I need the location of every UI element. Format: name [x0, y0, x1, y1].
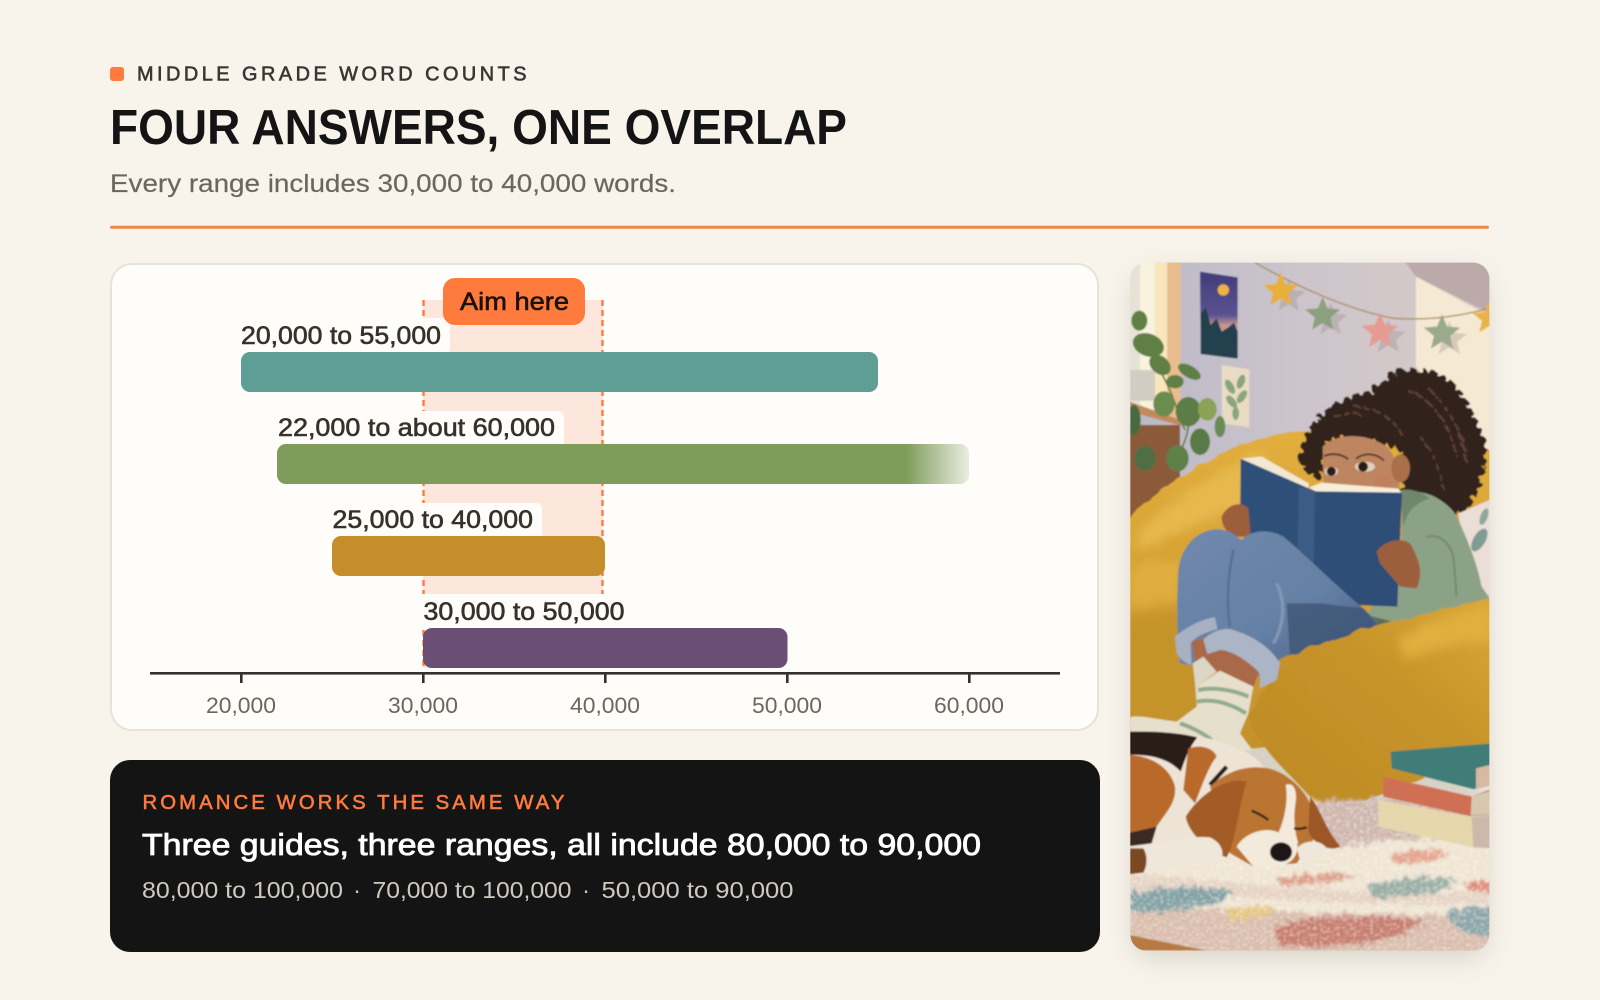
- callout ranges: ·: [353, 877, 361, 903]
- callout ranges: 70,000 to 100,000: [372, 877, 572, 903]
- stacked books: [1378, 743, 1493, 848]
- callout ranges: 50,000 to 90,000: [602, 877, 794, 903]
- callout ranges: ·: [582, 877, 590, 903]
- dog ears: [1186, 781, 1247, 857]
- x axis: 20,000: [206, 693, 276, 718]
- bar: 22,000 to about 60,000: 22,000 to about 60,000: [278, 414, 555, 442]
- subtitle: Every range includes 30,000 to 40,000 words.: [110, 170, 676, 198]
- star bunting: [1255, 263, 1506, 354]
- feet and cuffs: [1175, 617, 1280, 688]
- jeans: [1177, 529, 1387, 680]
- callout eyebrow: ROMANCE WORKS THE SAME WAY: [142, 792, 568, 814]
- callout ranges: 80,000 to 100,000: [142, 877, 343, 903]
- x axis: 30,000: [388, 693, 458, 718]
- bar: 20,000 to 55,000: 20,000 to 55,000: [241, 322, 441, 350]
- beanbag front lobe: [1248, 597, 1497, 804]
- hoodie: [1360, 490, 1493, 627]
- eyebrow marker: [110, 67, 124, 81]
- face: [1323, 436, 1410, 492]
- hair: [1302, 371, 1484, 512]
- callout headline: Three guides, three ranges, all include 80,000 to 90,000: [142, 827, 981, 862]
- wall: [1140, 262, 1490, 478]
- poster: night forest: [1200, 272, 1238, 359]
- x axis: 50,000: [752, 693, 822, 718]
- eyebrow: MIDDLE GRADE WORD COUNTS: [137, 64, 530, 86]
- x axis: [150, 672, 1060, 718]
- sleeping beagle: [1127, 731, 1341, 875]
- hands: [1222, 504, 1420, 588]
- header: [110, 64, 847, 198]
- bar: 30,000 to 50,000: 30,000 to 50,000: [424, 598, 624, 626]
- image shadow: [1134, 274, 1486, 958]
- rug: [1120, 800, 1500, 957]
- dog head: [1210, 767, 1317, 867]
- poster: leaf print: [1222, 365, 1249, 427]
- socks: [1130, 657, 1253, 751]
- x axis: 40,000: [570, 693, 640, 718]
- bar: 30,000 to 50,000: [423, 598, 788, 668]
- shelf and plant: [1127, 311, 1225, 522]
- callout: aim here: [443, 278, 585, 325]
- dog body: [1130, 736, 1265, 835]
- bar: 22,000 to about 60,000: [277, 414, 969, 484]
- beanbag back: [1130, 430, 1490, 750]
- panel: range chart: [111, 264, 1098, 730]
- illustration: girl reading on a beanbag with sleeping beagle: [1130, 262, 1490, 951]
- bar: 20,000 to 55,000: [241, 322, 878, 392]
- bar: 25,000 to 40,000: 25,000 to 40,000: [332, 506, 533, 534]
- label chips: [233, 318, 633, 630]
- pillow: [1457, 498, 1490, 599]
- infographic canvas: [110, 66, 1496, 968]
- callout: aim here: Aim here: [460, 288, 569, 316]
- title: FOUR ANSWERS, ONE OVERLAP: [110, 101, 847, 155]
- dog paws: [1196, 836, 1224, 856]
- bar: 25,000 to 40,000: [332, 506, 605, 576]
- callout ranges: [142, 877, 794, 903]
- window and curtain: [1127, 260, 1181, 423]
- panel: romance callout: [110, 760, 1100, 952]
- open book: [1240, 457, 1402, 607]
- target band 30,000 to 40,000: [423, 300, 603, 668]
- dog nose and eyes: [1270, 842, 1292, 862]
- x axis: 60,000: [934, 693, 1004, 718]
